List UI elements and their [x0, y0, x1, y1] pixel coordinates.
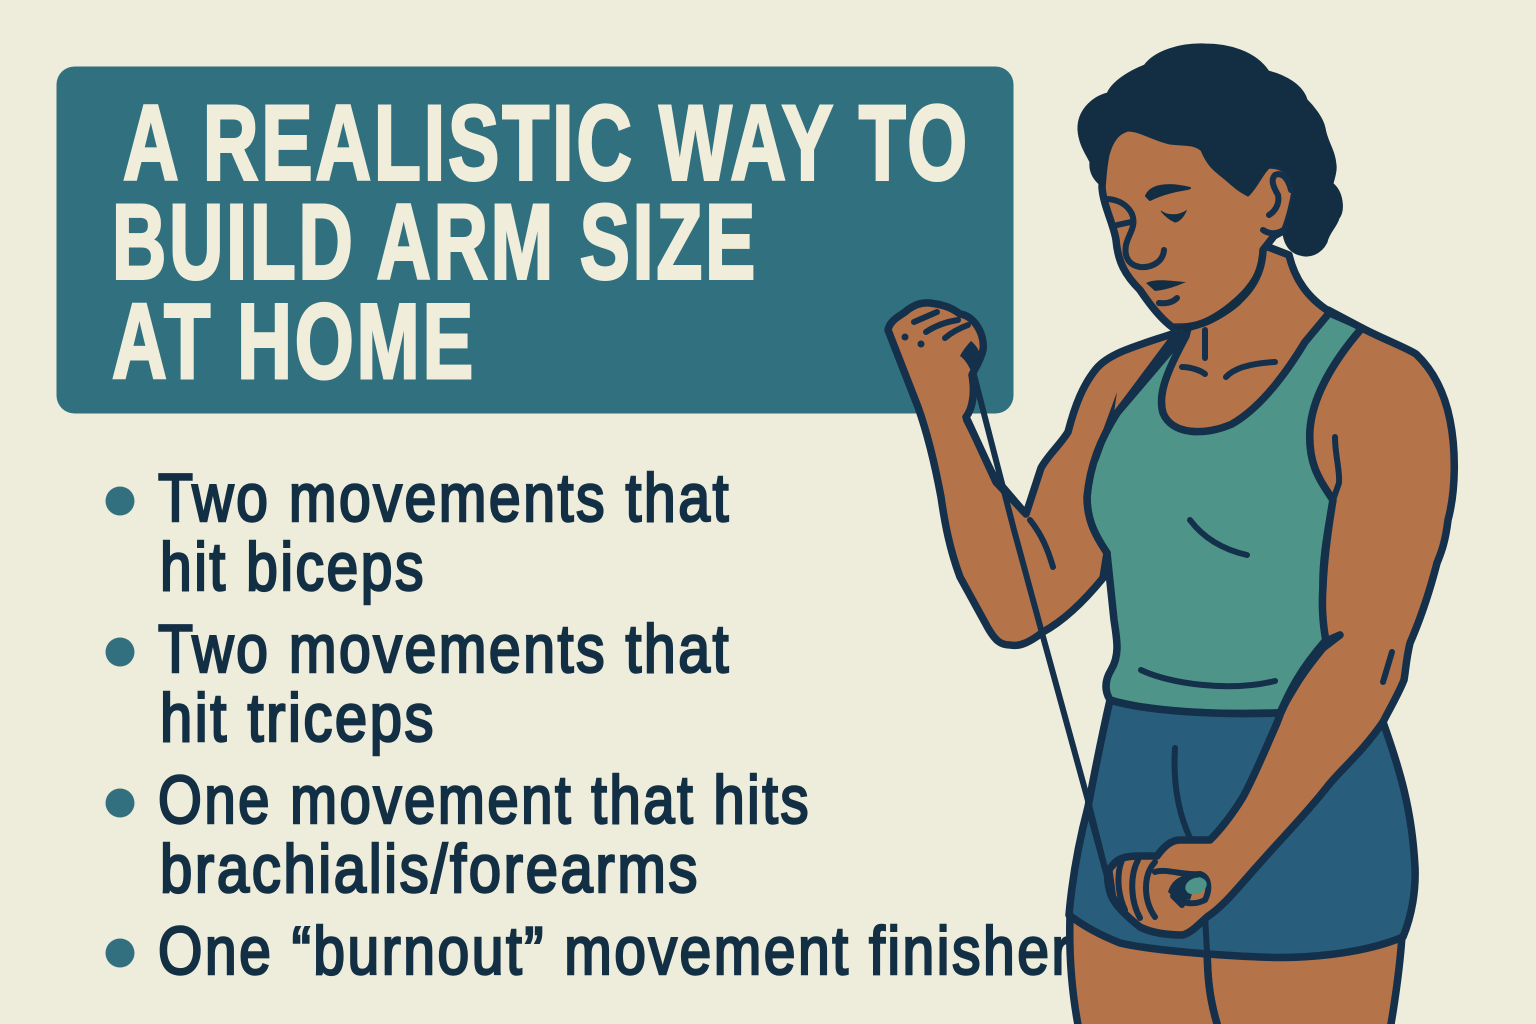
fist details [902, 312, 980, 376]
jaw shadow [1172, 248, 1263, 332]
elbow crease [1030, 520, 1053, 567]
right arm [1108, 328, 1454, 935]
title [112, 82, 970, 401]
upper left arm and forearm [888, 303, 1178, 645]
bullet: triceps: Two movements that [158, 611, 731, 687]
bullet: brachialis: One movement that hits [158, 762, 811, 838]
ear [1263, 174, 1291, 233]
far eye and nose [1108, 199, 1164, 267]
title panel [56, 66, 1014, 414]
neck and collarbone lines [1182, 330, 1275, 377]
tank straps [1330, 314, 1362, 328]
bullet: triceps [106, 611, 731, 756]
bullet: biceps: Two movements that [158, 460, 731, 536]
title: AT HOME [112, 281, 476, 401]
closed eye [1161, 211, 1186, 222]
bullet: brachialis [106, 762, 811, 907]
bullet list [106, 460, 1073, 989]
shorts crease lines [1088, 748, 1207, 952]
bullet: biceps: hit biceps [160, 529, 426, 605]
armpit shadow [1098, 392, 1117, 462]
mouth [1146, 280, 1186, 303]
bullet: triceps: hit triceps [160, 680, 436, 756]
tank top [1087, 310, 1362, 714]
figure: woman with resistance band [888, 45, 1454, 1024]
title: A REALISTIC WAY TO [123, 82, 970, 202]
bullet: burnout: One “burnout” movement finisher [158, 913, 1073, 989]
hair [1079, 45, 1341, 255]
head [1079, 45, 1341, 332]
tank top lines [1110, 520, 1282, 713]
title: BUILD ARM SIZE [112, 182, 758, 302]
resistance band [966, 375, 1108, 880]
neck and chest skin [1161, 240, 1330, 432]
hand gripping band [1106, 860, 1209, 918]
legs [1070, 915, 1402, 1024]
eyebrow [1146, 185, 1190, 200]
face [1102, 100, 1295, 327]
shorts [1069, 700, 1415, 957]
bullet: biceps [106, 460, 731, 605]
bullet: brachialis: brachialis/forearms [160, 831, 700, 907]
right arm details [1333, 437, 1392, 682]
